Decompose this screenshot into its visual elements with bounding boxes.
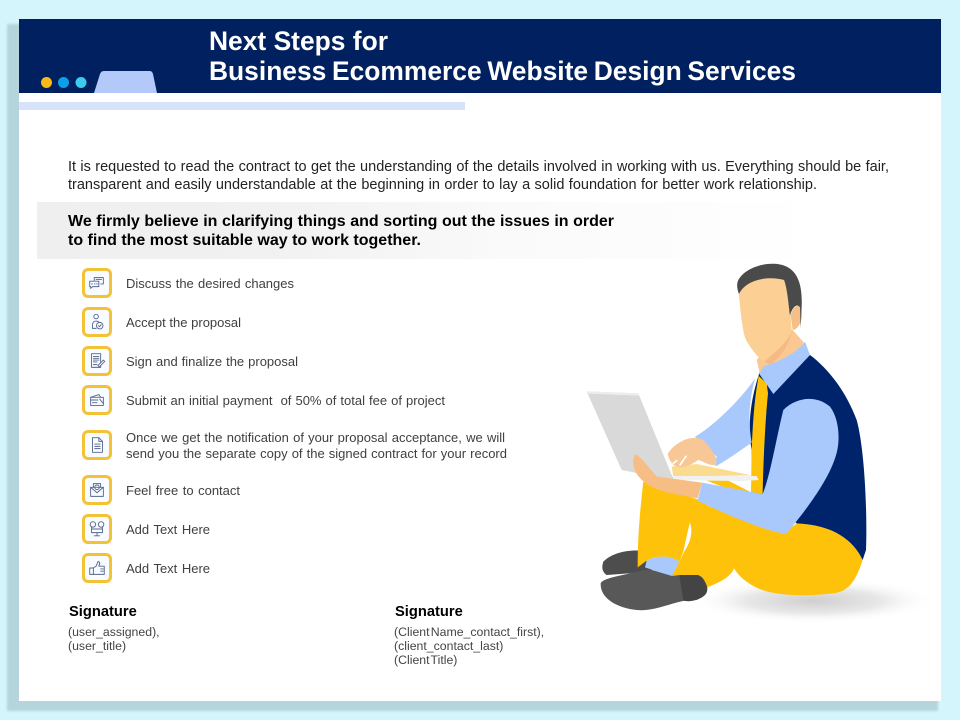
step: submit payment (82, 385, 445, 415)
signature block: company (68, 604, 160, 653)
ground shadow (690, 578, 937, 623)
typing hand (668, 438, 717, 467)
icon: person with check (82, 307, 112, 337)
signature block: company: (user_title) (68, 639, 126, 653)
step: signed contract copy (82, 430, 507, 461)
step: contact: Feel free to contact (126, 483, 240, 498)
highlighted statement: to find the most suitable way to work together. (68, 232, 421, 249)
neck shade (765, 333, 792, 365)
title: Next Steps for (209, 26, 388, 56)
step: discuss changes: Discuss the desired changes (126, 276, 294, 291)
step: accept proposal (82, 307, 241, 337)
title (209, 26, 796, 86)
icon: monitor with gears (82, 514, 112, 544)
illustration: man with laptop (586, 264, 904, 618)
signature block: client: (Client Title) (394, 653, 457, 667)
signature block: client: Signature (395, 604, 463, 620)
head (737, 264, 802, 361)
vest (750, 355, 866, 560)
shirt collar (759, 342, 810, 394)
step: signed contract copy: Once we get the notification of your proposal acceptance, we will (126, 430, 505, 445)
step: sign and finalize (82, 346, 298, 376)
title: Business Ecommerce Website Design Services (209, 56, 796, 86)
next steps list (82, 268, 507, 583)
laptop (587, 391, 759, 481)
supporting hand (633, 454, 702, 498)
step: add text two: Add Text Here (126, 561, 210, 576)
neck (757, 327, 804, 374)
signature block: company: (user_assigned), (68, 625, 160, 639)
intro paragraph: It is requested to read the contract to get the understanding of the details involved in working with us. Everything should be fair, (68, 159, 889, 175)
highlighted statement (37, 202, 820, 259)
step: submit payment: Submit an initial payment of 50% of total fee of project (126, 393, 445, 408)
icon: contact envelope (82, 475, 112, 505)
signature block: client: (Client Name_contact_first), (394, 625, 544, 639)
icon: thumbs up (82, 553, 112, 583)
signature block: client: (client_contact_last) (394, 639, 503, 653)
icon: payment card (82, 385, 112, 415)
yellow trousers (638, 481, 863, 595)
step: add text one (82, 514, 210, 544)
step: contact (82, 475, 240, 505)
light blue rule (19, 102, 465, 110)
necktie (751, 376, 768, 494)
icon: chat bubbles (82, 268, 112, 298)
intro paragraph: transparent and easily understandable at the beginning in order to lay a solid foundation for better work relationship. (68, 177, 817, 193)
step: add text one: Add Text Here (126, 522, 210, 537)
intro paragraph (68, 159, 889, 193)
step: signed contract copy: send you the separate copy of the signed contract for your record (126, 446, 507, 461)
highlighted statement: We firmly believe in clarifying things and sorting out the issues in order (68, 213, 614, 230)
trouser highlight (683, 523, 691, 553)
icon: signed document (82, 346, 112, 376)
step: discuss changes (82, 268, 294, 298)
header banner (19, 19, 941, 93)
decorative dots and tab (41, 71, 157, 93)
step: accept proposal: Accept the proposal (126, 315, 241, 330)
signature block: company: Signature (69, 604, 137, 620)
signature block: client (394, 604, 544, 667)
icon: document (82, 430, 112, 460)
near sleeve (698, 399, 839, 533)
far arm (695, 378, 755, 467)
shoes (601, 551, 707, 610)
step: sign and finalize: Sign and finalize the proposal (126, 354, 298, 369)
sock (645, 557, 679, 576)
step: add text two (82, 553, 210, 583)
